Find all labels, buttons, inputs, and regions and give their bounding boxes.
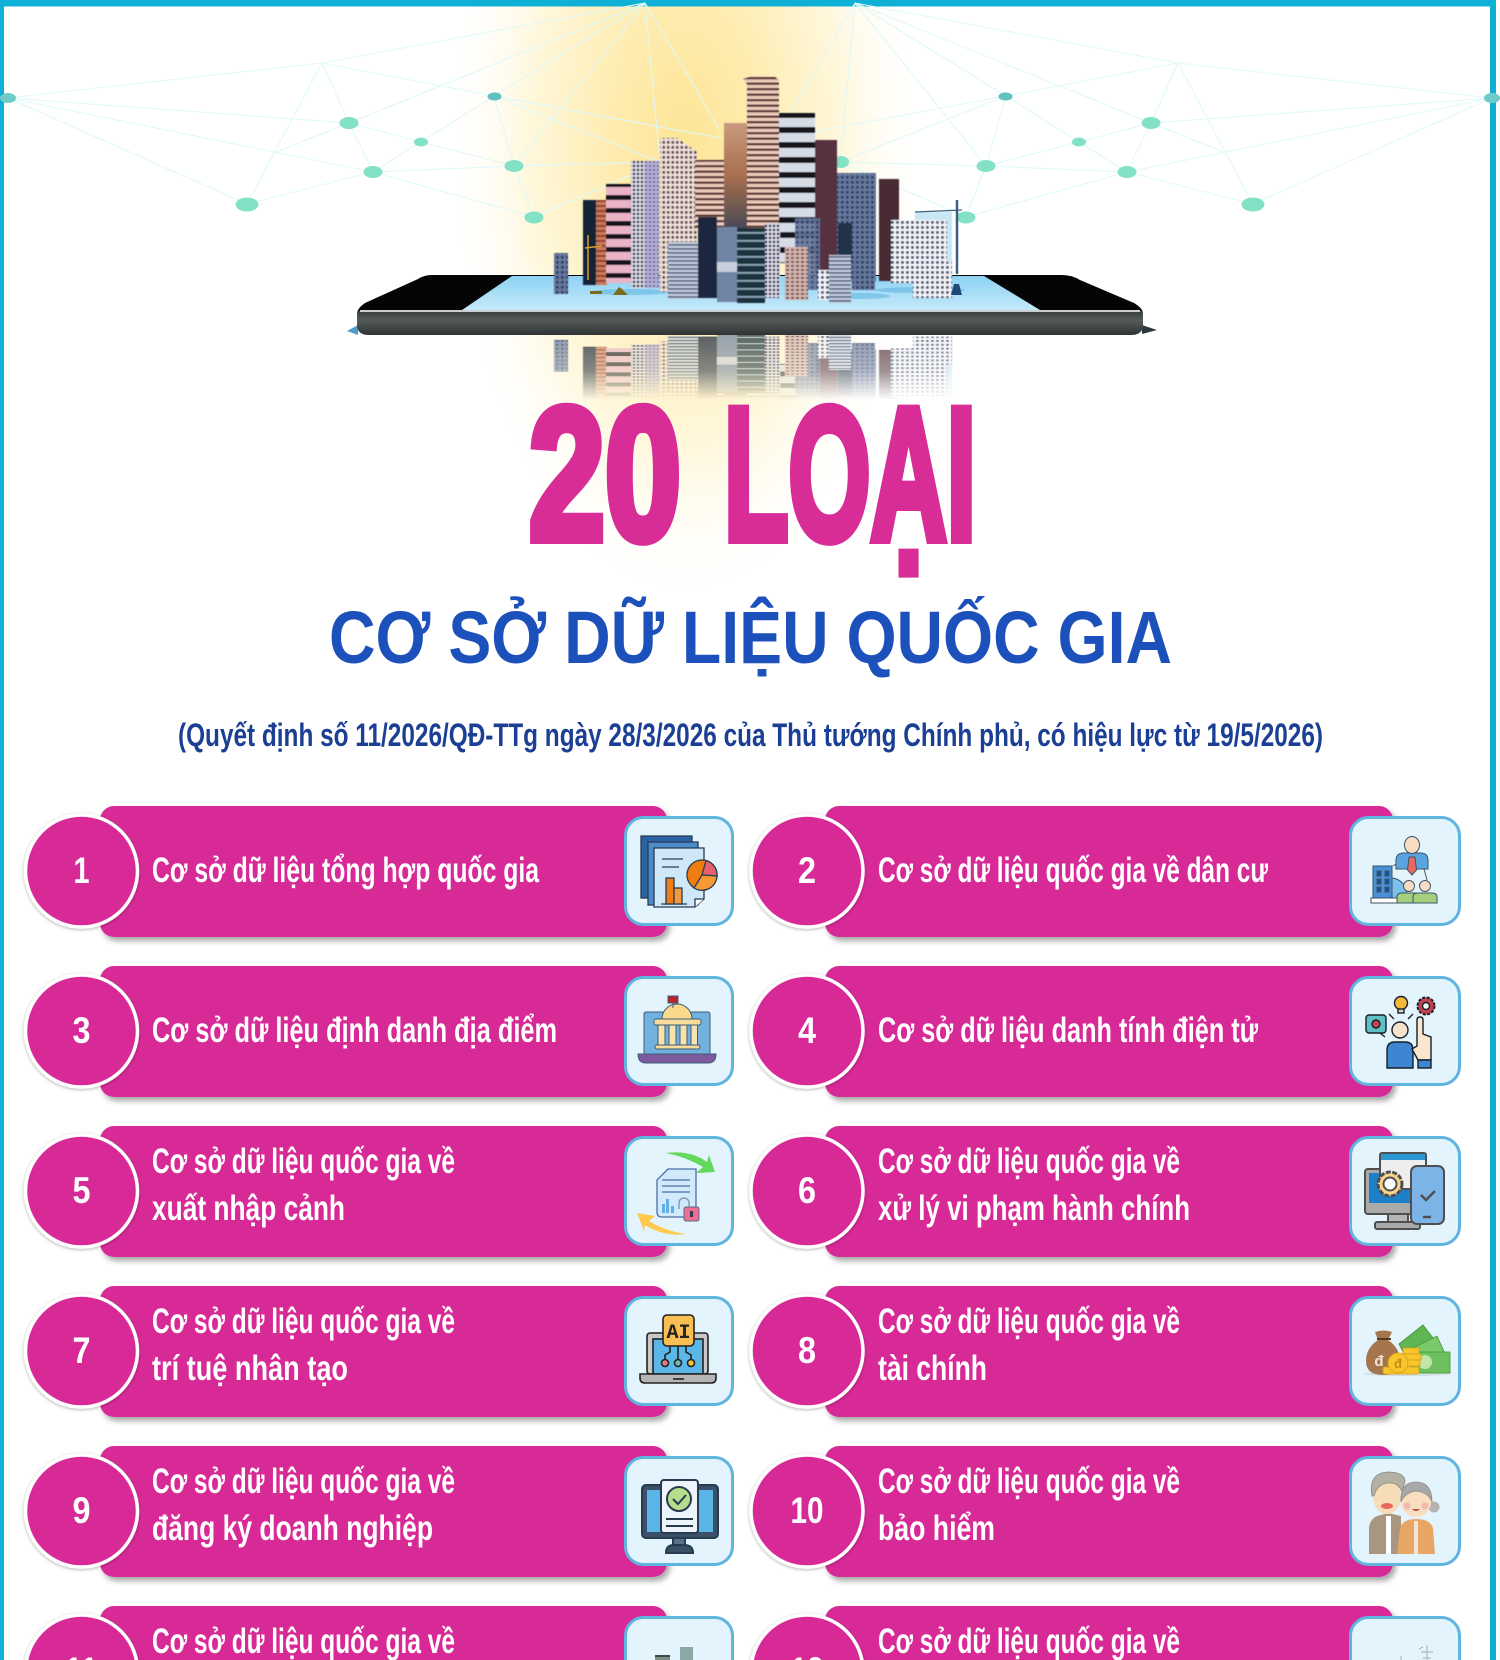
panel: item 5 — [26, 1126, 732, 1257]
subtitle: CƠ SỞ DỮ LIỆU QUỐC GIA — [329, 596, 1172, 679]
text 10: bảo hiểm — [878, 1509, 995, 1548]
number 9: 9 — [72, 1490, 90, 1531]
text 7 — [152, 1302, 455, 1388]
panel: item 10 — [751, 1446, 1460, 1577]
number 6 — [751, 1135, 863, 1247]
text 6: Cơ sở dữ liệu quốc gia về — [878, 1142, 1180, 1181]
icon: certified document on monitor — [626, 1458, 732, 1564]
text 9: Cơ sở dữ liệu quốc gia về — [152, 1462, 455, 1501]
crane left — [585, 235, 602, 280]
icon: AI laptop — [626, 1298, 732, 1404]
icon: digital identity — [1350, 978, 1460, 1084]
number 8: 8 — [798, 1330, 816, 1371]
text 12: Cơ sở dữ liệu quốc gia về — [878, 1622, 1180, 1660]
number 5 — [26, 1135, 138, 1247]
number 1: 1 — [74, 850, 90, 891]
text 8: Cơ sở dữ liệu quốc gia về — [878, 1302, 1180, 1341]
phone shadow tips — [347, 325, 358, 335]
number 1 — [26, 815, 138, 927]
number 7: 7 — [72, 1330, 90, 1371]
text 5: xuất nhập cảnh — [152, 1189, 345, 1228]
text 6: xử lý vi phạm hành chính — [878, 1189, 1190, 1228]
icon: document exchange — [626, 1138, 732, 1244]
number 3 — [26, 975, 138, 1087]
number 9 — [26, 1455, 138, 1567]
number 4: 4 — [798, 1010, 816, 1051]
text 10 — [878, 1462, 1180, 1548]
icon: population — [1350, 818, 1460, 924]
text 6 — [878, 1142, 1190, 1228]
text 11: Cơ sở dữ liệu quốc gia về — [152, 1622, 455, 1660]
text 7: Cơ sở dữ liệu quốc gia về — [152, 1302, 455, 1341]
text 8 — [878, 1302, 1180, 1388]
icon: government building on laptop — [626, 978, 732, 1084]
panel: item 12 — [751, 1606, 1460, 1660]
text 9 — [152, 1462, 455, 1548]
number 12 — [751, 1615, 863, 1660]
text 1: Cơ sở dữ liệu tổng hợp quốc gia — [152, 851, 539, 890]
icon: AI laptop: AI — [666, 1322, 691, 1345]
text 5 — [152, 1142, 455, 1228]
icon: elderly couple — [1350, 1458, 1460, 1564]
text 4: Cơ sở dữ liệu danh tính điện tử — [878, 1011, 1258, 1050]
panel: item 11 — [26, 1606, 732, 1660]
panel: item 9 — [26, 1446, 732, 1577]
number 4 — [751, 975, 863, 1087]
text 8: tài chính — [878, 1349, 987, 1388]
text 9: đăng ký doanh nghiệp — [152, 1509, 433, 1548]
title word: LOẠI — [724, 369, 976, 579]
title: 20 LOẠI — [529, 369, 976, 579]
number 10 — [751, 1455, 863, 1567]
panel: item 6 — [751, 1126, 1460, 1257]
panel: item 1 — [26, 806, 732, 937]
panel: item 2 — [751, 806, 1460, 937]
panel: item 8 — [751, 1286, 1460, 1417]
title number: 20 — [529, 369, 681, 579]
icon: documents and charts — [626, 818, 732, 924]
reflection — [554, 335, 953, 398]
panel: item 3 — [26, 966, 732, 1097]
icon: power tower — [1350, 1618, 1460, 1660]
panel: item 7 — [26, 1286, 732, 1417]
phone top face — [358, 275, 1142, 311]
number 3: 3 — [72, 1010, 90, 1051]
icon: money — [1350, 1298, 1460, 1404]
icon: money: đ — [1374, 1353, 1384, 1370]
number 7 — [26, 1295, 138, 1407]
text 2: Cơ sở dữ liệu quốc gia về dân cư — [878, 851, 1268, 890]
text 5: Cơ sở dữ liệu quốc gia về — [152, 1142, 455, 1181]
icon: money: đ — [1394, 1356, 1402, 1371]
crane right — [915, 200, 962, 274]
excavators — [590, 287, 628, 295]
hero: smartphone with city — [347, 76, 1157, 510]
icon: buildings — [626, 1618, 732, 1660]
text 10: Cơ sở dữ liệu quốc gia về — [878, 1462, 1180, 1501]
number 11 — [26, 1615, 138, 1660]
buildings — [554, 76, 952, 303]
background sun glow — [0, 0, 1500, 640]
ground shadows — [590, 287, 965, 299]
number 10: 10 — [790, 1490, 824, 1531]
number 8 — [751, 1295, 863, 1407]
phone screen — [462, 276, 1040, 310]
icon: devices with gear — [1350, 1138, 1460, 1244]
number 6: 6 — [798, 1170, 816, 1211]
panel: item 4 — [751, 966, 1460, 1097]
number 5: 5 — [72, 1170, 90, 1211]
network graphic — [0, 3, 1500, 224]
number 2: 2 — [798, 850, 816, 891]
phone side — [357, 308, 1143, 335]
text 3: Cơ sở dữ liệu định danh địa điểm — [152, 1011, 557, 1050]
text 7: trí tuệ nhân tạo — [152, 1349, 348, 1388]
number 2 — [751, 815, 863, 927]
